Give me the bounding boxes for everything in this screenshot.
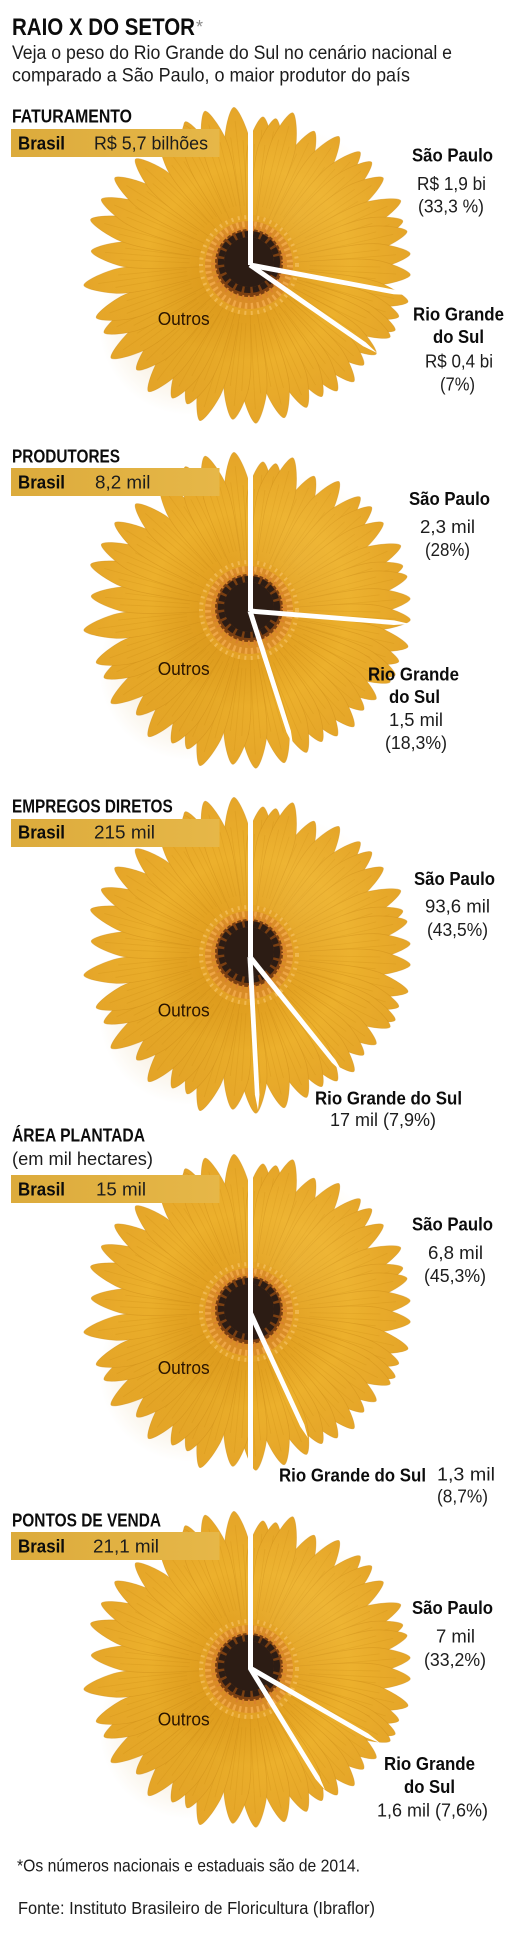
national total bar: 21,1 mil: [93, 1535, 159, 1556]
label: São Paulo: São Paulo: [412, 145, 493, 166]
label: Rio Grande do Sul: 1,5 mil: [389, 709, 443, 730]
label: Rio Grande do Sul: do Sul: [433, 326, 484, 347]
label: São Paulo: [414, 868, 495, 940]
label: Rio Grande do Sul: (8,7%): [437, 1486, 488, 1507]
national total bar: 15 mil: [96, 1179, 146, 1200]
flower pie: produtores: [82, 440, 411, 770]
panel: pontos de venda: [11, 1499, 493, 1829]
label: Rio Grande do Sul: [315, 1087, 462, 1130]
national total bar: Brasil: [18, 132, 65, 153]
label: Rio Grande do Sul: Rio Grande: [384, 1753, 475, 1774]
label: Outros: Outros: [158, 659, 210, 679]
flower pie: pontos de venda: [82, 1499, 411, 1829]
label: Rio Grande do Sul: 17 mil (7,9%): [330, 1109, 436, 1130]
label: São Paulo: [409, 488, 490, 560]
heading: pontos de venda: PONTOS DE VENDA: [12, 1510, 161, 1531]
label: Outros: Outros: [158, 1710, 210, 1730]
label: Rio Grande do Sul: do Sul: [389, 686, 440, 707]
flower pie: empregos diretos: [82, 785, 411, 1115]
national total bar: [11, 129, 220, 157]
label: Rio Grande do Sul: Rio Grande do Sul: [315, 1087, 462, 1108]
label: Rio Grande do Sul: [279, 1464, 495, 1507]
label: São Paulo: [412, 145, 493, 217]
label: São Paulo: [412, 1597, 493, 1670]
panel: faturamento: [11, 95, 504, 425]
label: São Paulo: 7 mil: [436, 1626, 475, 1647]
source: Fonte: Instituto Brasileiro de Floricultura (Ibraflor): [18, 1898, 375, 1918]
label: São Paulo: (33,3 %): [418, 196, 484, 217]
label: Rio Grande do Sul: Rio Grande: [413, 304, 504, 325]
label: São Paulo: São Paulo: [414, 868, 495, 889]
label: São Paulo: R$ 1,9 bi: [417, 173, 486, 194]
panel: produtores: [11, 440, 490, 770]
heading: empregos diretos: EMPREGOS DIRETOS: [12, 796, 173, 817]
label: Rio Grande do Sul: (18,3%): [385, 732, 447, 753]
label: Rio Grande do Sul: do Sul: [404, 1776, 455, 1797]
label: São Paulo: 2,3 mil: [420, 516, 475, 537]
label: São Paulo: (45,3%): [424, 1265, 486, 1286]
subtitle: [12, 42, 452, 86]
national total bar: Brasil: [18, 1535, 65, 1556]
heading: area plantada: [12, 1125, 153, 1169]
label: São Paulo: 6,8 mil: [428, 1242, 483, 1263]
label: São Paulo: São Paulo: [412, 1597, 493, 1618]
label: Outros: Outros: [158, 1001, 210, 1021]
national total bar: [11, 1175, 220, 1203]
flower pie: area plantada: [82, 1142, 411, 1472]
label: São Paulo: (43,5%): [427, 919, 488, 940]
label: Rio Grande do Sul: Rio Grande do Sul: [279, 1465, 426, 1486]
label: São Paulo: [412, 1214, 493, 1286]
heading: faturamento: FATURAMENTO: [12, 106, 132, 127]
label: São Paulo: São Paulo: [409, 488, 490, 509]
label: São Paulo: 93,6 mil: [425, 896, 490, 917]
label: São Paulo: São Paulo: [412, 1214, 493, 1235]
heading: area plantada: (em mil hectares): [12, 1148, 153, 1169]
national total bar: 8,2 mil: [95, 471, 150, 492]
label: Rio Grande do Sul: [377, 1753, 488, 1821]
panel: empregos diretos: [11, 785, 495, 1130]
label: Rio Grande do Sul: 1,6 mil (7,6%): [377, 1800, 488, 1821]
national total bar: [11, 819, 220, 847]
footnote: *Os números nacionais e estaduais são de 2014.: [17, 1856, 360, 1876]
subtitle: Veja o peso do Rio Grande do Sul no cenário nacional e: [12, 42, 452, 64]
subtitle: comparado a São Paulo, o maior produtor do país: [12, 64, 410, 86]
title: RAIO X DO SETOR: [12, 14, 195, 41]
heading: produtores: PRODUTORES: [12, 446, 120, 467]
label: São Paulo: (33,2%): [424, 1649, 486, 1670]
label: Rio Grande do Sul: [368, 664, 459, 753]
flower pie: faturamento: [82, 95, 411, 425]
label: Outros: Outros: [158, 1358, 210, 1378]
national total bar: Brasil: [18, 821, 65, 842]
label: Rio Grande do Sul: Rio Grande: [368, 664, 459, 685]
heading: area plantada: ÁREA PLANTADA: [12, 1125, 145, 1146]
title: *: [196, 17, 203, 37]
national total bar: 215 mil: [94, 821, 155, 842]
label: Outros: Outros: [158, 309, 210, 329]
national total bar: [11, 468, 220, 496]
label: Rio Grande do Sul: R$ 0,4 bi: [425, 351, 493, 372]
national total bar: Brasil: [18, 471, 65, 492]
label: São Paulo: (28%): [425, 539, 470, 560]
national total bar: Brasil: [18, 1179, 65, 1200]
national total bar: [11, 1532, 220, 1560]
label: Rio Grande do Sul: 1,3 mil: [437, 1464, 495, 1484]
label: Rio Grande do Sul: (7%): [440, 374, 475, 395]
panel: area plantada: [11, 1125, 495, 1507]
label: Rio Grande do Sul: [413, 304, 504, 395]
national total bar: R$ 5,7 bilhões: [94, 132, 208, 153]
